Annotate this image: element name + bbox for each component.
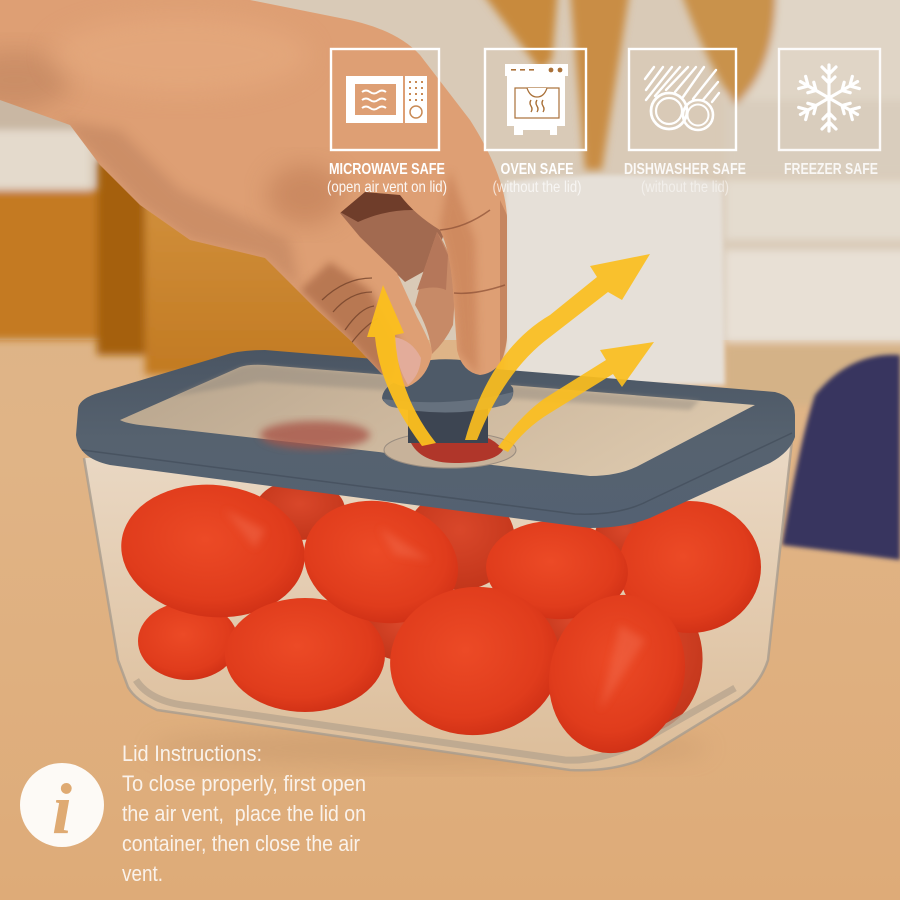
label: oven safe: (without the lid) bbox=[492, 179, 582, 196]
icon: freezer safe bbox=[779, 49, 880, 150]
label: microwave safe: MICROWAVE SAFE bbox=[329, 161, 445, 178]
label: oven safe bbox=[492, 161, 582, 196]
arrow: middle bbox=[465, 254, 650, 440]
upper hand light bbox=[70, 58, 74, 62]
middle finger bbox=[415, 232, 456, 354]
label: microwave safe bbox=[327, 161, 447, 196]
hand shading: lower edge bbox=[70, 122, 298, 281]
lid instructions text: container, then close the air bbox=[122, 831, 360, 856]
thumb wrinkles bbox=[322, 278, 378, 345]
lid window reflection band bbox=[170, 365, 700, 410]
shadow of container bbox=[150, 730, 710, 766]
thumbnail bbox=[394, 337, 421, 385]
icon: info bbox=[20, 763, 104, 849]
lid instructions text: the air vent, place the lid on bbox=[122, 801, 366, 826]
thumb shading bbox=[300, 262, 400, 385]
label: microwave safe: (open air vent on lid) bbox=[327, 179, 447, 196]
white cup bbox=[505, 175, 725, 385]
hand shading: wrist bbox=[0, 50, 70, 110]
hand shading: knuckle bbox=[267, 165, 343, 225]
hand bbox=[0, 0, 520, 400]
back of hand, thumb and index finger bbox=[0, 0, 520, 400]
palm shadow bbox=[338, 185, 445, 282]
tomatoes front bbox=[115, 476, 761, 769]
yellow arrows bbox=[367, 254, 654, 452]
lid instructions text: vent. bbox=[122, 861, 163, 886]
glass floor bbox=[136, 680, 735, 760]
icon: oven safe bbox=[485, 49, 586, 150]
icon: microwave safe bbox=[331, 49, 439, 150]
arrow: left bbox=[367, 285, 436, 446]
label: dishwasher safe: (without the lid) bbox=[641, 179, 729, 196]
lid front lip line bbox=[82, 433, 792, 514]
air vent knob bbox=[382, 359, 516, 468]
icon: dishwasher safe bbox=[629, 49, 736, 150]
lid clear window bbox=[120, 365, 755, 476]
lid instructions text: To close properly, first open bbox=[122, 771, 366, 796]
index finger shading bbox=[440, 170, 478, 376]
label: dishwasher safe: DISHWASHER SAFE bbox=[624, 161, 746, 178]
lid instructions text: Lid Instructions: bbox=[122, 741, 262, 766]
towel bbox=[782, 355, 900, 560]
label: oven safe: OVEN SAFE bbox=[500, 161, 574, 178]
arrow: right bbox=[498, 342, 654, 452]
lid bbox=[76, 350, 795, 528]
label: dishwasher safe bbox=[624, 161, 746, 196]
glass outer edge bbox=[84, 440, 792, 770]
icon: info: i bbox=[52, 769, 72, 849]
tomatoes seen through lid bbox=[260, 421, 370, 449]
finger creases bbox=[440, 210, 505, 293]
lid instructions text bbox=[122, 741, 366, 886]
glass container body bbox=[84, 440, 792, 770]
tomato highlights bbox=[225, 510, 645, 710]
tomatoes behind bbox=[255, 480, 713, 741]
